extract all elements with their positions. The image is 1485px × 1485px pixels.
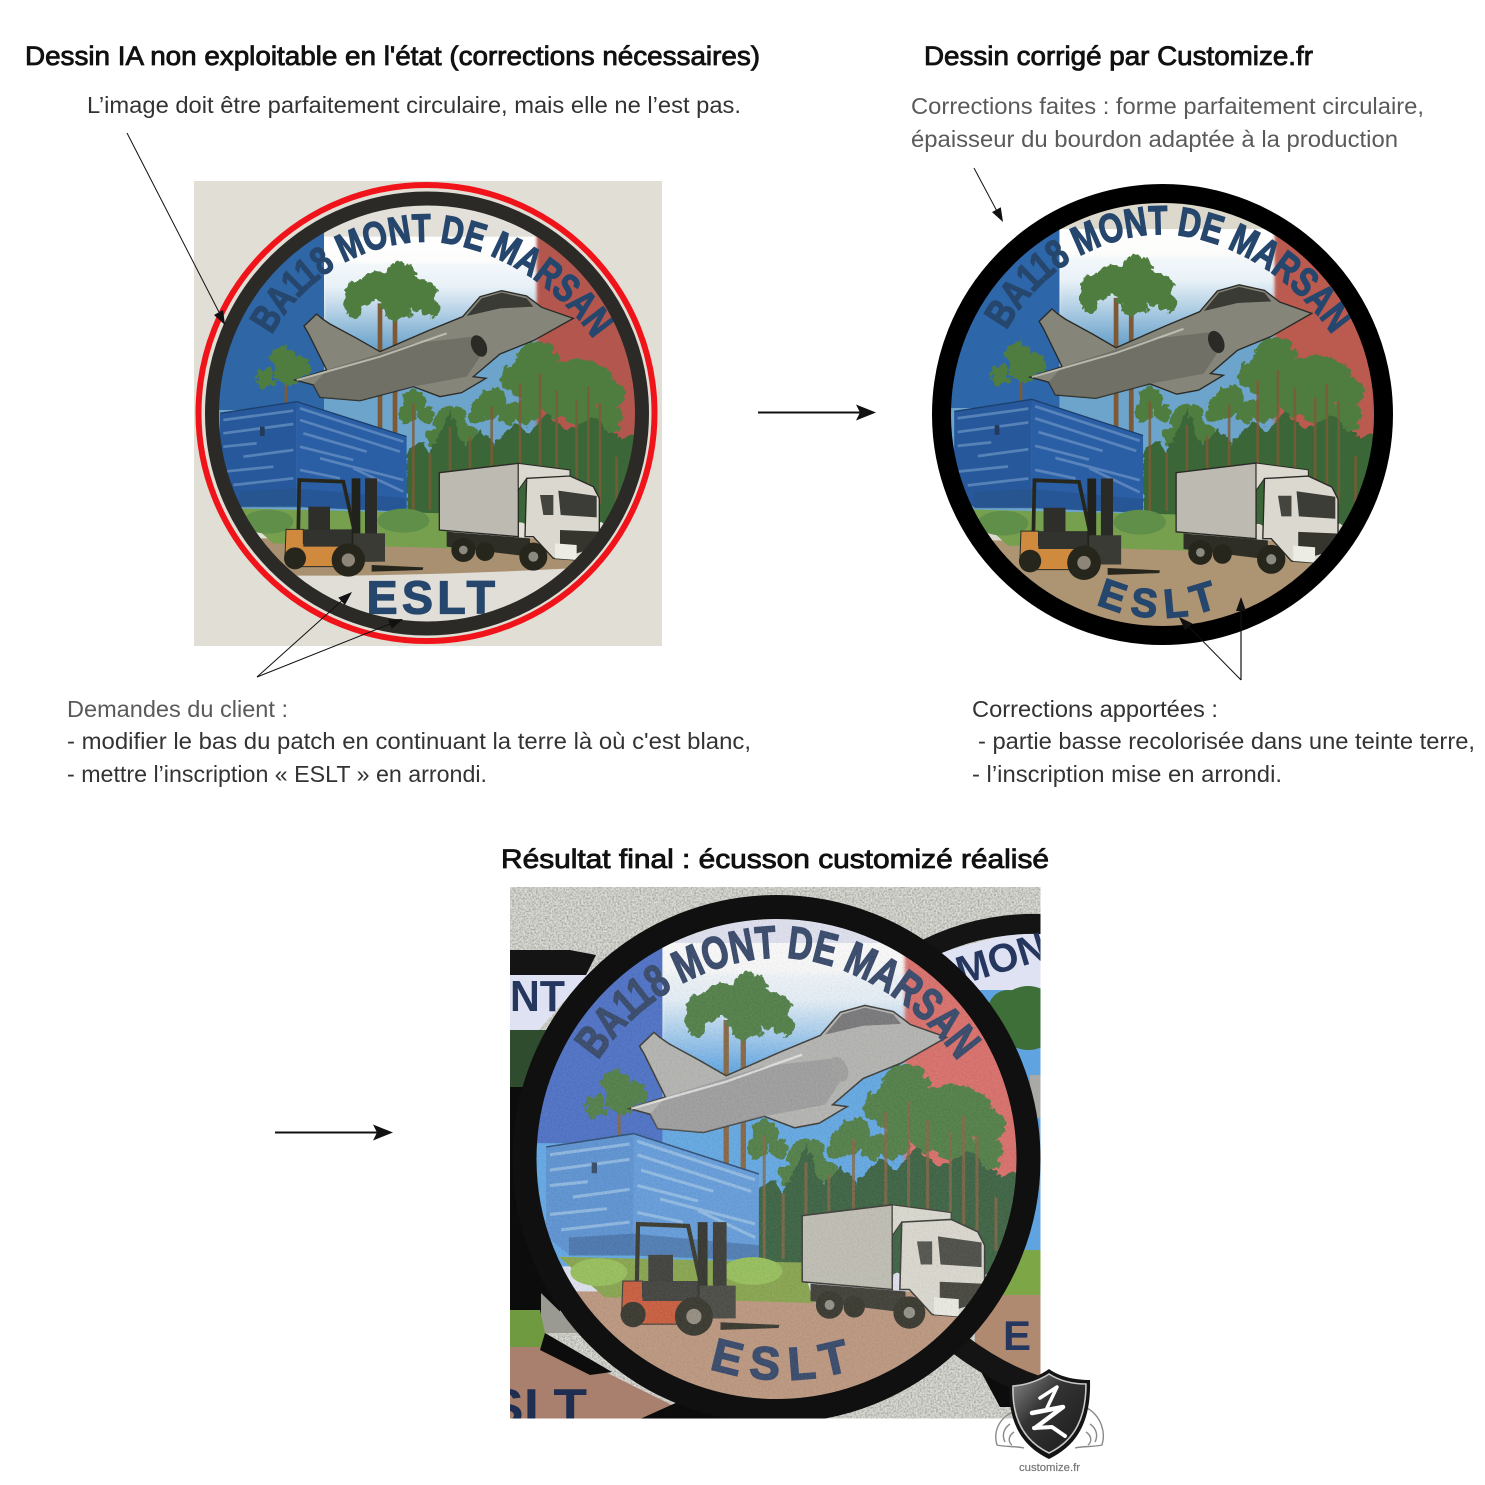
blue building [220, 402, 407, 512]
neighbouring patch: right: E [1003, 1312, 1031, 1359]
arrows: to recoloured ground [1179, 597, 1246, 680]
ground and grass [559, 1256, 957, 1399]
main embroidered patch [522, 895, 1040, 1418]
arrow: to final result [275, 1124, 393, 1140]
text: client requests [67, 696, 751, 787]
panel: corrected patch [932, 184, 1393, 645]
truck [802, 1205, 985, 1329]
shield inner [1013, 1374, 1086, 1453]
patch title lettering: BA118 MONT DE MARSAN [983, 205, 1351, 334]
neighbouring patch: left [510, 950, 728, 1418]
ESLT curved lettering: ESLT [711, 1338, 846, 1381]
ESLT curved lettering: ESLT [1098, 578, 1212, 619]
tricolour sky [536, 919, 1016, 1292]
neighbouring patch: left: NT [510, 972, 565, 1021]
text: client requests: Demandes du client : [67, 696, 288, 722]
red guide circle [198, 185, 654, 641]
logo: customize.fr shield [996, 1369, 1103, 1474]
truck [439, 463, 599, 571]
neighbouring patch: left: SLT [487, 1379, 587, 1437]
pine trees [991, 255, 1377, 525]
truck [1176, 463, 1338, 574]
text: image must be circular: L’image doit être parfaitement circulaire, mais elle ne l’est pas. [87, 92, 741, 118]
heading: AI drawing not usable: Dessin IA non exploitable en l'état (corrections nécessaires) [25, 41, 760, 71]
tricolour sky [951, 203, 1374, 540]
neighbouring patch: right: MON [951, 925, 1052, 994]
blue building [954, 399, 1143, 513]
stitched border ring [524, 907, 1028, 1411]
pine trees [585, 972, 1020, 1274]
illustration: corrected artwork [951, 203, 1374, 626]
photo: embroidered patches on fabric [510, 887, 1040, 1418]
text: corrections applied: Corrections apportées : [972, 696, 1218, 722]
grey fabric background [510, 887, 1040, 1418]
text: corrections made [911, 93, 1424, 152]
text: corrections applied: - partie basse recolorisée dans une teinte terre, [978, 728, 1475, 754]
tricolour sky [219, 232, 635, 512]
arrow: first step to second [758, 404, 876, 420]
ESLT straight lettering: ESLT [367, 571, 495, 623]
embroidery thread texture [530, 910, 1020, 1400]
ground and grass [974, 510, 1313, 626]
jet [295, 291, 573, 401]
dark border ring [212, 198, 642, 628]
patch title lettering: BA118 MONT DE MARSAN [573, 925, 982, 1060]
arrow: to red circle [127, 133, 225, 325]
blue building [546, 1134, 759, 1261]
shield [1009, 1369, 1090, 1459]
forklift [284, 478, 423, 577]
jet [1030, 285, 1312, 398]
logo monogram [1032, 1387, 1065, 1436]
white lower area [296, 568, 566, 622]
heading: final result: Résultat final : écusson customizé réalisé [501, 844, 1049, 874]
patch title lettering: BA118 MONT DE MARSAN [248, 214, 614, 338]
text: client requests: - mettre l’inscription « ESLT » en arrondi. [67, 761, 487, 787]
text: corrections applied: - l’inscription mise en arrondi. [972, 761, 1282, 787]
logo ornaments [996, 1408, 1103, 1448]
logo wordmark: customize.fr [1019, 1462, 1080, 1474]
neighbouring patch: right [923, 914, 1040, 1407]
forklift [1019, 478, 1160, 580]
arrows: to lower white area [257, 592, 403, 677]
jet [629, 1005, 947, 1132]
beige backdrop [194, 181, 662, 646]
text: corrections made: Corrections faites : forme parfaitement circulaire, [911, 93, 1424, 119]
text: client requests: - modifier le bas du patch en continuant la terre là où c'est blanc, [67, 728, 751, 754]
ground and grass [242, 508, 574, 576]
panel: AI patch on beige backdrop [194, 181, 662, 646]
pine trees [256, 262, 638, 523]
forklift [621, 1222, 779, 1336]
illustration: AI patch artwork [219, 214, 635, 615]
text: corrections applied [972, 696, 1475, 787]
arrow: to corrected border [974, 168, 1003, 222]
text: corrections made: épaisseur du bourdon adaptée à la production [911, 126, 1398, 152]
heading: corrected drawing: Dessin corrigé par Customize.fr [924, 41, 1313, 71]
black border ring [942, 194, 1384, 636]
